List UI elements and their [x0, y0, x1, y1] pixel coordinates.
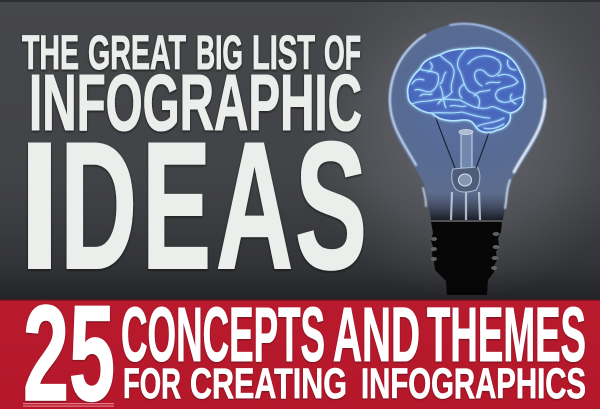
title line: The Great Big List Of: OF: [324, 27, 361, 80]
panel: red banner: [0, 277, 600, 409]
title line: Ideas: E: [142, 105, 211, 307]
brain folds: [412, 49, 523, 129]
title line: Ideas: A: [216, 105, 293, 307]
title line: Ideas: S: [295, 105, 367, 307]
title line: The Great Big List Of: BIG: [196, 27, 243, 80]
bulb glass: [388, 23, 547, 220]
title line: The Great Big List Of: [22, 27, 361, 80]
brain outline: [408, 48, 525, 132]
title line: The Great Big List Of: GREAT: [88, 27, 186, 80]
title: [19, 27, 367, 307]
brain: [408, 48, 525, 132]
title line: Ideas: D: [60, 105, 137, 307]
background panel: [0, 0, 600, 301]
bulb highlights: [390, 24, 545, 208]
subheading: For Creating Infographics: [123, 360, 586, 408]
subheading: For Creating Infographics: CREATING: [190, 360, 347, 408]
title line: The Great Big List Of: THE: [22, 27, 79, 80]
screw base: [431, 222, 502, 295]
heading: Concepts and Themes: AND: [333, 292, 420, 378]
icon: light bulb with brain: [388, 23, 547, 295]
wires: [433, 108, 497, 168]
title line: Ideas: I: [19, 105, 60, 307]
filament stem: [451, 130, 480, 220]
heading: Concepts and Themes: CONCEPTS: [121, 292, 325, 378]
subheading: For Creating Infographics: FOR: [123, 360, 181, 408]
title line: The Great Big List Of: LIST: [252, 27, 315, 80]
title line: Infographic: INFOGRAPHIC: [29, 58, 362, 147]
title line: Ideas: [19, 105, 367, 307]
underline below 25: [23, 403, 114, 407]
base thread highlights: [431, 232, 500, 270]
